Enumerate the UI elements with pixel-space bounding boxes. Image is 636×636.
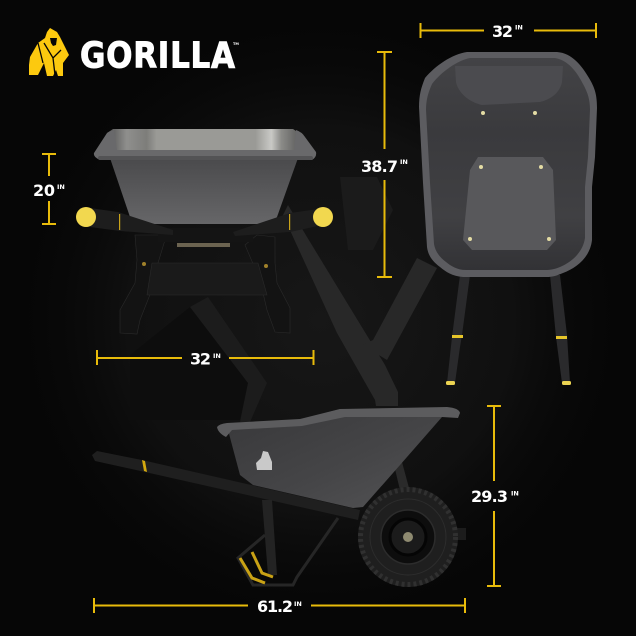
top view wheelbarrow: [419, 52, 597, 385]
dimension: 29.3 in: IN: [511, 490, 519, 498]
rim: [217, 407, 460, 437]
left handle: [90, 208, 173, 235]
right handle: [233, 209, 318, 236]
rim: [94, 130, 316, 160]
dimension: 61.2 in: IN: [294, 600, 302, 608]
stand post: [262, 500, 277, 575]
dimension: 32 in top: 32: [492, 22, 513, 41]
handle knobs: [76, 207, 96, 227]
logo on tub: [256, 451, 272, 470]
wheel: [358, 487, 458, 587]
front view wheelbarrow: [76, 129, 333, 334]
back wall: [455, 66, 563, 105]
tub body: [110, 158, 298, 224]
dimension: 32 in top: IN: [515, 24, 523, 32]
right leg: [245, 235, 290, 333]
dimension: 38.7 in: 38.7: [361, 157, 398, 176]
dimension: 20 in: IN: [57, 183, 65, 191]
dimension: 20 in: [33, 154, 65, 224]
trademark: TM: [233, 42, 239, 46]
dimension: 32 in front: [97, 350, 314, 368]
wordmark: GORILLA: [80, 34, 235, 76]
side view wheelbarrow: [92, 407, 466, 587]
left leg: [120, 235, 165, 334]
cross brace: [147, 263, 267, 295]
icon: gorilla: [29, 28, 69, 76]
steel interior: [107, 129, 305, 150]
left handle: [447, 275, 470, 383]
floor plate: [463, 157, 556, 250]
dimension: 32 in front: 32: [190, 350, 211, 368]
stand frame: [238, 518, 338, 585]
bolts: [481, 111, 485, 115]
handle bar: [92, 451, 360, 520]
dimension: 38.7 in: [361, 52, 408, 277]
dimension: 32 in front: IN: [213, 352, 221, 360]
logo: Gorilla: [29, 28, 239, 76]
dimension: 32 in top: [420, 22, 596, 41]
right handle: [550, 275, 570, 383]
dimension: 61.2 in: 61.2: [257, 597, 293, 616]
outer rim: [419, 52, 597, 277]
dimension: 61.2 in: [94, 597, 465, 616]
rear strut: [394, 462, 409, 490]
dimension: 38.7 in: IN: [400, 158, 408, 166]
dimension: 29.3 in: 29.3: [471, 487, 508, 506]
yellow foot guards: [240, 558, 265, 583]
inner basin: [426, 58, 590, 270]
dimension: 20 in: 20: [33, 181, 55, 200]
tub: [228, 409, 447, 508]
dimension: 29.3 in: [471, 406, 519, 586]
